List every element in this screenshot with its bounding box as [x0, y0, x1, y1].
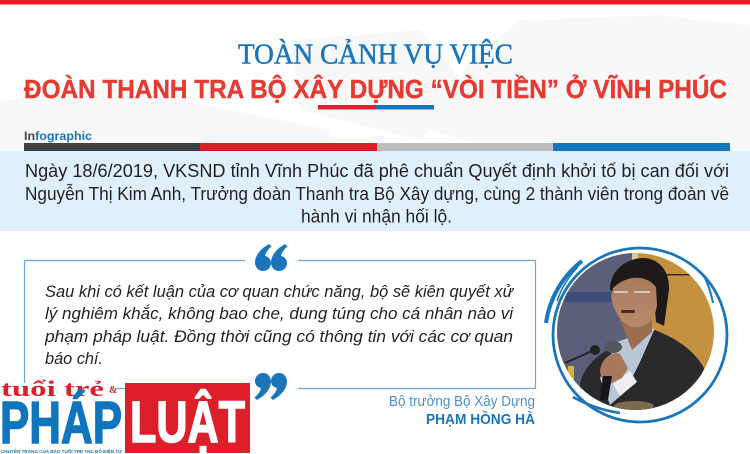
intro panel: Nguyễn Thị Kim Anh, Trưởng đoàn Thanh tra Bộ Xây dựng, cùng 2 thành viên trong đoàn về	[25, 183, 729, 204]
intro panel: hành vi nhận hối lộ.	[301, 206, 452, 226]
logo red block	[125, 383, 250, 453]
intro text: Ngày 18/6/2019, VKSND tỉnh Vĩnh Phúc đã phê chuẩn Quyết định khởi tố bị can đối với	[25, 161, 729, 181]
quote text: báo chí.	[45, 349, 103, 368]
glasses	[614, 291, 650, 293]
logo: Tuoi Tre & Phap Luat	[0, 376, 250, 454]
title underline accent	[318, 105, 434, 110]
hair	[610, 258, 669, 326]
top red bar	[0, 0, 750, 4]
four colour divider bar	[24, 143, 730, 151]
logo luat text: LUẬT	[130, 390, 245, 454]
speaker attribution: Bộ trưởng Bộ Xây Dựng	[389, 393, 535, 410]
logo: Tuoi Tre & Phap Luat: &	[109, 385, 117, 396]
logo top text: tuổi trẻ	[1, 376, 104, 401]
logo tagline: CHUYÊN TRANG CỦA BÁO TUỔI TRẺ THỦ ĐÔ ĐIỆN TỬ	[1, 447, 122, 454]
quote text: phạm pháp luật. Đồng thời cũng có thông tin với các cơ quan	[44, 327, 513, 346]
speaker attribution	[389, 393, 535, 428]
portrait	[546, 248, 727, 422]
quote text	[44, 282, 514, 368]
hand and microphone	[600, 353, 628, 384]
suit	[580, 330, 704, 414]
face	[611, 278, 657, 327]
icon: opening quote mark	[255, 244, 288, 271]
quote text: Sau khi có kết luận của cơ quan chức năng, bộ sẽ kiên quyết xử	[45, 282, 514, 301]
intro panel	[0, 151, 750, 231]
mouth	[621, 310, 635, 313]
icon: closing quote mark	[254, 373, 287, 400]
title line 1: TOÀN CẢNH VỤ VIỆC	[238, 40, 513, 70]
portrait rings	[546, 248, 727, 422]
title	[24, 40, 727, 104]
speaker attribution: PHẠM HỒNG HÀ	[426, 410, 535, 428]
microphone left	[565, 351, 592, 363]
infographic label: Infographic	[24, 129, 92, 143]
portrait photo	[555, 250, 717, 414]
quote text: lý nghiêm khắc, không bao che, dung túng cho cá nhân nào vi	[45, 304, 514, 323]
desk microphones	[614, 401, 654, 411]
neck	[618, 315, 652, 350]
shirt	[600, 328, 655, 405]
background watermark: hands exchanging money	[0, 15, 750, 151]
quote box frame	[24, 260, 536, 388]
